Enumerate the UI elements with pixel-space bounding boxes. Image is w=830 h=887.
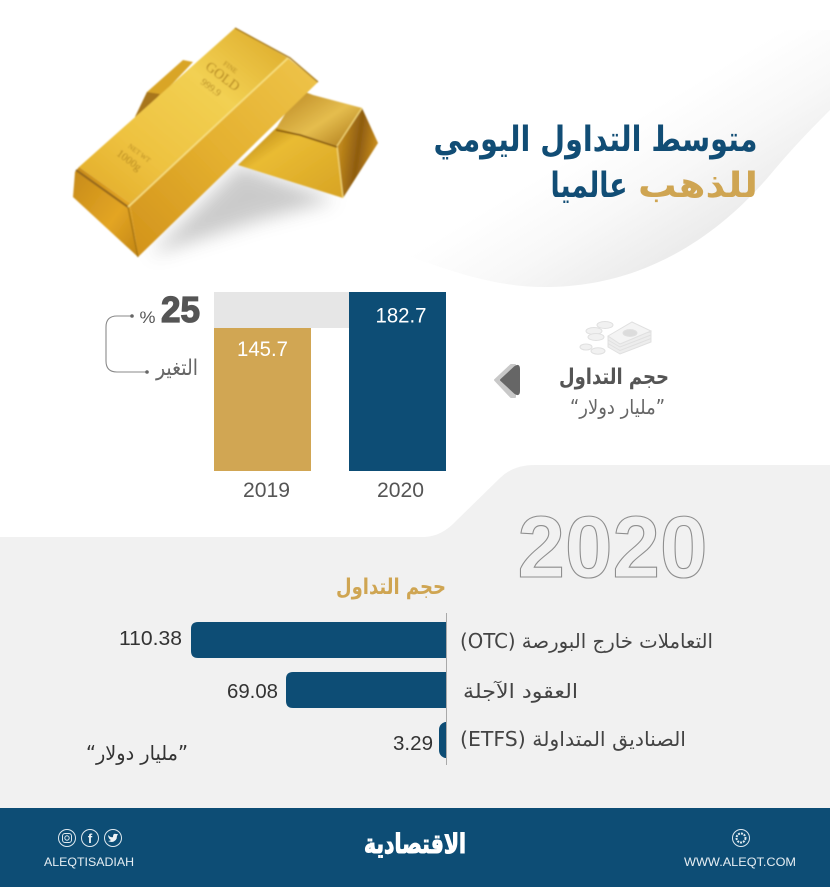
- bar engraving: FINE: [222, 60, 239, 75]
- panel background: [0, 465, 830, 808]
- value OTC: 110.38: [119, 627, 182, 650]
- bracket connector: [106, 316, 147, 372]
- label ETFs: الصناديق المتداولة (ETFS): [460, 727, 686, 751]
- bar engraving: NET WT: [126, 142, 153, 165]
- trading volume label: [559, 365, 669, 419]
- axis: [446, 613, 448, 765]
- bar 2019: [214, 328, 311, 471]
- bar engraving: [114, 60, 242, 174]
- footer band: [0, 808, 830, 887]
- bar 2020: [349, 292, 446, 471]
- 25 value: 25: [161, 289, 200, 330]
- icon: twitter: [104, 830, 122, 846]
- label 2019: 2019: [243, 479, 290, 502]
- label futures: العقود الآجلة: [463, 679, 578, 703]
- panel: annual bar chart: [214, 292, 446, 502]
- title line 1: متوسط التداول اليومي: [434, 120, 758, 160]
- change label: التغير: [155, 356, 198, 381]
- social handle: ALEQTISADIAH: [44, 855, 134, 869]
- bar OTC: [191, 622, 446, 658]
- unit note: ”مليار دولار“: [86, 741, 188, 765]
- value 2019: 145.7: [237, 338, 288, 361]
- footer: [0, 808, 830, 887]
- icon: left arrow: [495, 365, 519, 397]
- value futures: 69.08: [227, 680, 278, 703]
- horizontal bar chart: [119, 613, 713, 765]
- percent sign: %: [140, 308, 156, 327]
- outlined year: 2020: [518, 499, 708, 596]
- lower gold bar: [135, 60, 378, 198]
- title line 2 navy word: عالميا: [550, 166, 628, 206]
- gold bars image: [73, 28, 378, 257]
- section heading: حجم التداول: [336, 575, 446, 600]
- website address: WWW.ALEQT.COM: [684, 855, 796, 869]
- bar futures: [286, 672, 446, 708]
- label unit: ”مليار دولار“: [570, 395, 665, 419]
- label OTC: التعاملات خارج البورصة (OTC): [460, 629, 713, 653]
- bar ETFs: [439, 722, 446, 758]
- bar engraving: 1000g: [114, 148, 144, 174]
- icon: money and coins: [580, 322, 651, 354]
- panel: 2020 breakdown: [0, 465, 830, 808]
- value 2020: 182.7: [376, 304, 426, 328]
- label heading: حجم التداول: [559, 365, 669, 390]
- icon: facebook: f: [88, 831, 93, 846]
- background swoosh: [380, 30, 830, 287]
- bar shadow: [150, 165, 335, 255]
- icon: instagram: [58, 830, 76, 846]
- title: [434, 120, 758, 206]
- upper gold bar: [73, 28, 318, 257]
- logo: الاقتصادية: [364, 829, 466, 860]
- title line 2 gold word: للذهب: [638, 166, 758, 206]
- change band: [214, 292, 349, 328]
- bar engraving: GOLD: [202, 60, 242, 95]
- icon: facebook: [82, 830, 98, 846]
- bar engraving: 999.9: [198, 77, 223, 99]
- change callout: [106, 289, 200, 381]
- label 2020: 2020: [377, 479, 424, 502]
- value ETFs: 3.29: [393, 732, 433, 755]
- icon: website: [732, 830, 750, 846]
